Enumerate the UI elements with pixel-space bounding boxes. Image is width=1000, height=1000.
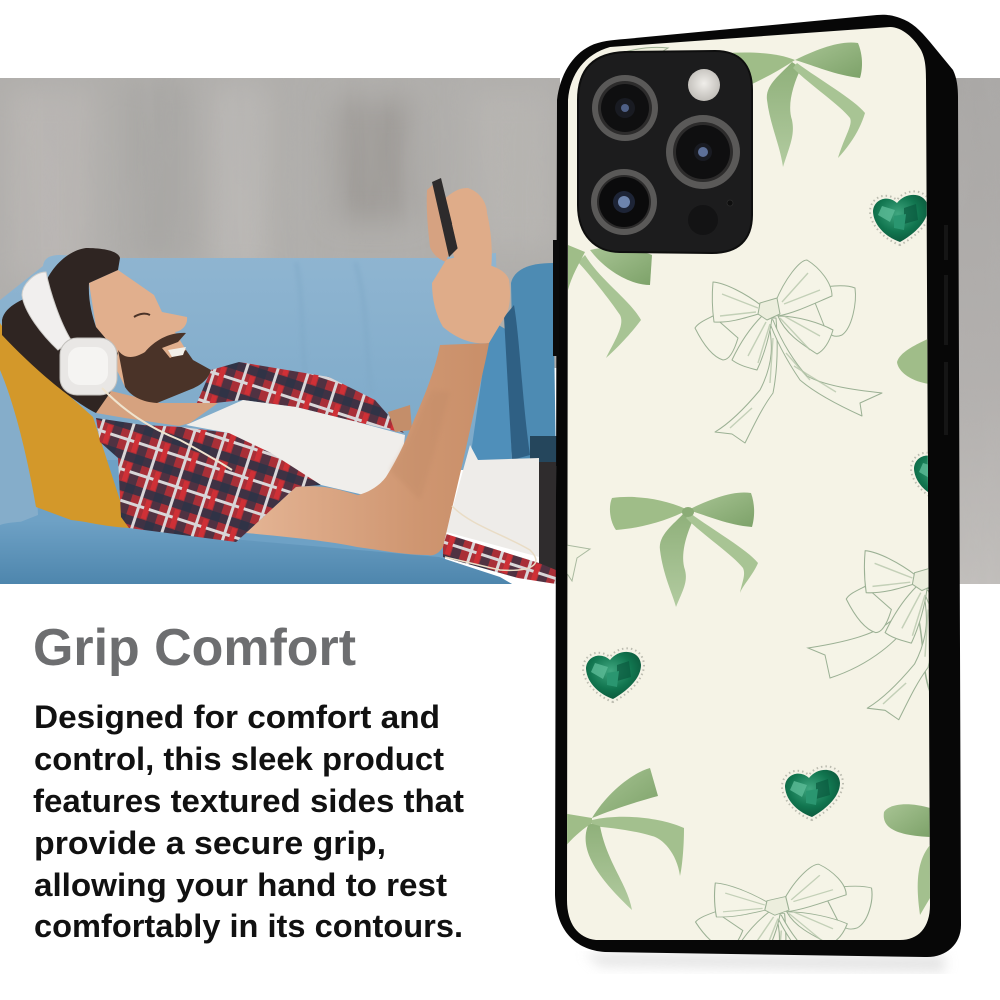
text block: description: comfortably in its contours. xyxy=(34,908,463,944)
hair xyxy=(2,248,120,413)
beard xyxy=(118,333,211,403)
pattern: bows and hearts xyxy=(567,42,930,940)
phone shadow xyxy=(585,953,945,972)
gem heart right top xyxy=(870,191,931,245)
dark fabric behind waist xyxy=(530,436,558,466)
green bow middle xyxy=(610,492,758,607)
sofa seat and left arm xyxy=(0,449,512,584)
head xyxy=(89,270,190,387)
yellow cushion xyxy=(0,323,129,528)
outline bow right xyxy=(806,550,929,720)
hands holding phone xyxy=(427,178,510,343)
lens 2 xyxy=(666,115,740,189)
panel: lifestyle photo xyxy=(0,78,560,584)
gem heart right middle xyxy=(910,452,928,496)
text block: description: allowing your hand to rest xyxy=(34,867,447,903)
wall strip right of phone xyxy=(950,78,1000,584)
forearm skin xyxy=(246,343,489,555)
green bow top xyxy=(727,42,865,167)
green loop right edge xyxy=(897,338,930,384)
sofa back and arm xyxy=(0,253,558,470)
outline bow top-left fragment xyxy=(626,46,670,51)
headphones xyxy=(22,272,536,570)
outline bow center xyxy=(695,260,882,443)
outline bow bottom xyxy=(695,864,873,940)
smile teeth xyxy=(168,347,186,357)
sensor xyxy=(688,205,718,235)
text block: description: Designed for comfort and xyxy=(34,699,440,735)
text block: description: control, this sleek product xyxy=(34,741,444,777)
flash xyxy=(688,69,720,101)
text block: description: features textured sides that xyxy=(33,783,464,819)
neck xyxy=(96,390,218,426)
camera island xyxy=(578,51,752,253)
concrete wall xyxy=(0,78,560,368)
jeans and belt xyxy=(539,462,556,575)
eye xyxy=(134,314,150,317)
microphone xyxy=(727,200,733,206)
phone case xyxy=(553,14,961,957)
case body xyxy=(555,15,961,957)
white t-shirt xyxy=(186,400,539,557)
lens 3 xyxy=(591,169,657,235)
left side button xyxy=(553,240,559,356)
text block: description: provide a secure grip, xyxy=(34,825,386,861)
outline tail fragment left xyxy=(566,545,590,581)
green bow lower right xyxy=(884,804,930,915)
gem heart left xyxy=(583,648,644,702)
back panel xyxy=(567,27,930,940)
heading: Grip Comfort xyxy=(33,619,356,677)
text block: description xyxy=(33,699,464,944)
green bow left xyxy=(568,245,652,358)
green bow lower left xyxy=(562,768,684,910)
gem heart center xyxy=(782,766,843,820)
right side buttons xyxy=(944,225,948,435)
lens 1 xyxy=(592,75,658,141)
plaid shirt xyxy=(96,362,556,584)
